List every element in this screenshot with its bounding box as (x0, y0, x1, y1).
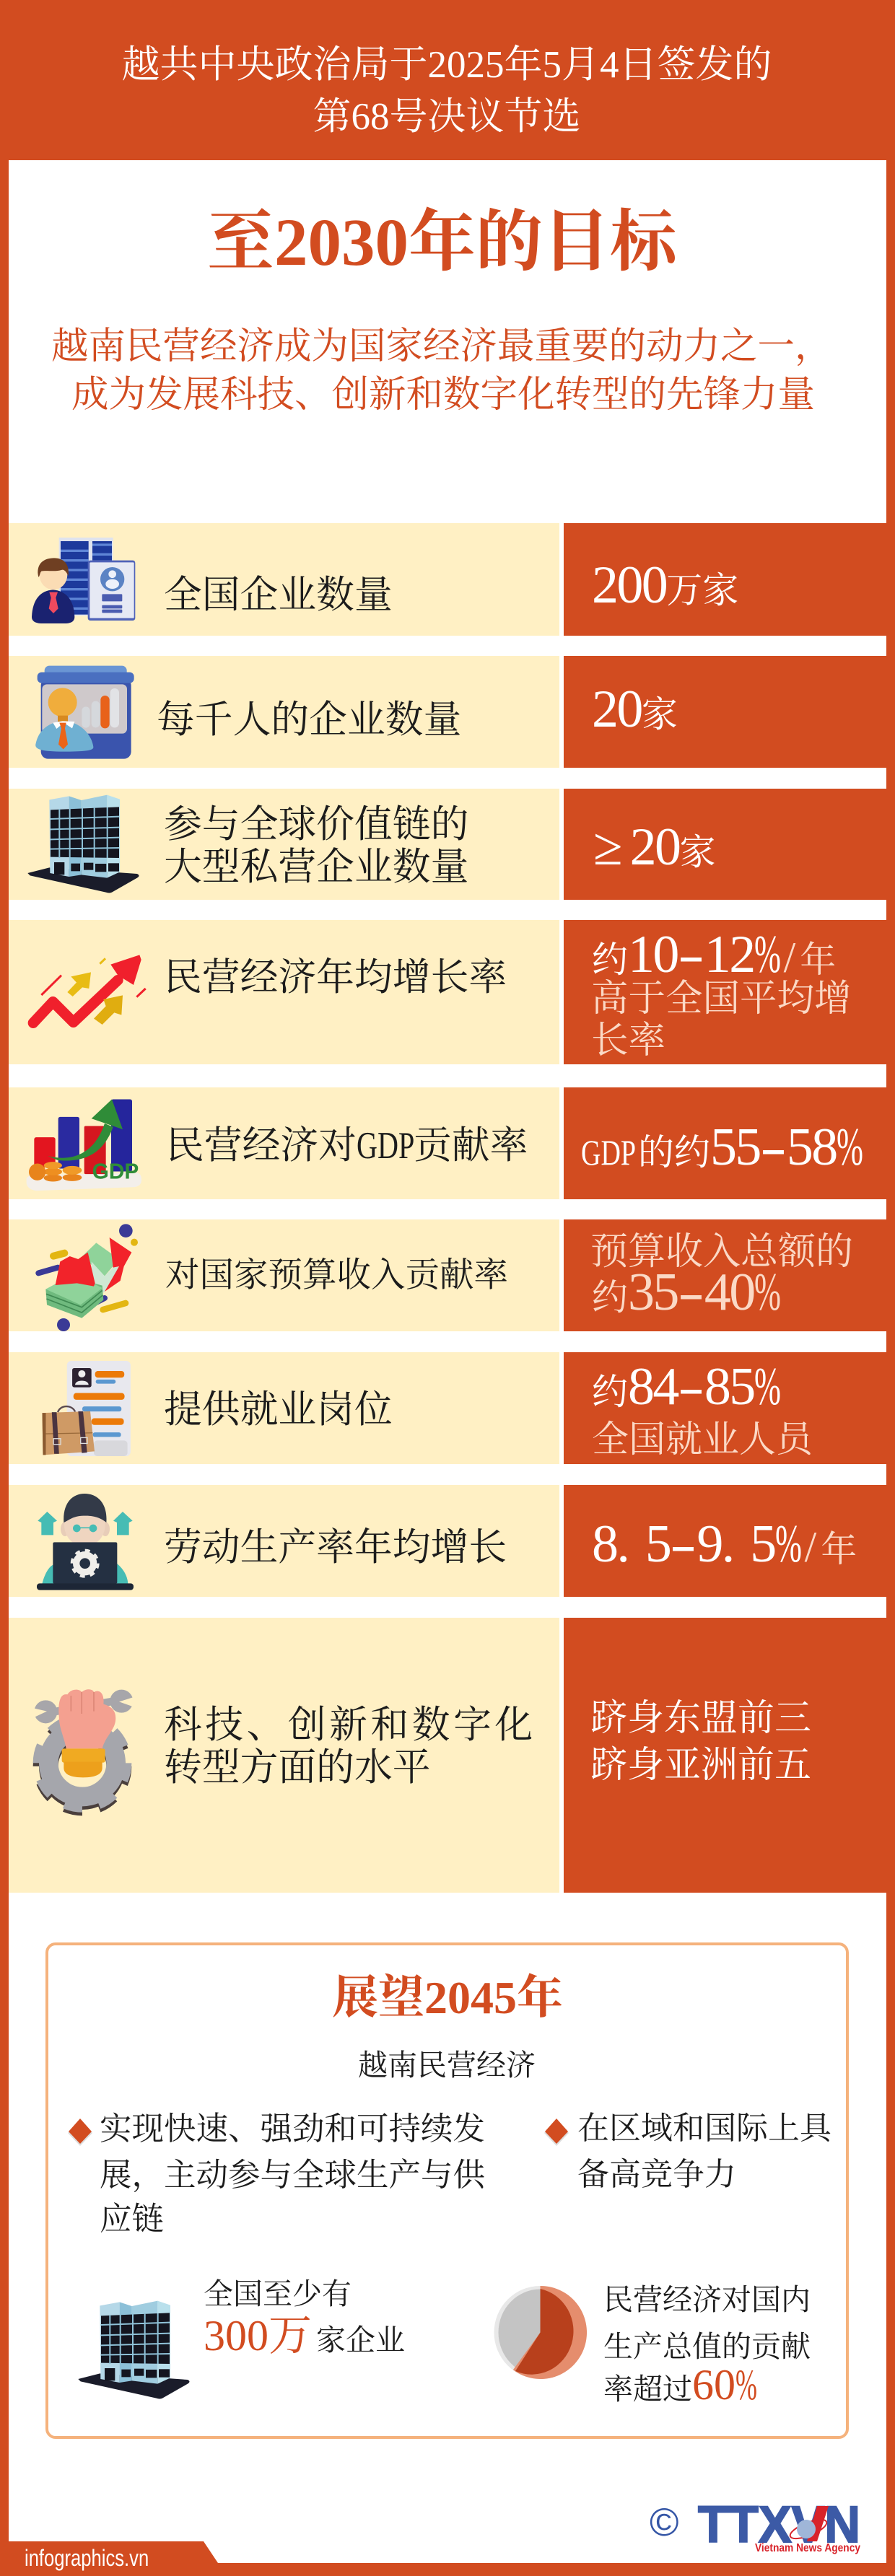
header title line 1: 越共中央政治局于2025年5月4日签发的 (121, 44, 772, 86)
row: large private enterprises in global value chains: 参与全球价值链的 (164, 804, 468, 846)
subtitle (51, 326, 832, 416)
panel: vision 2045 (45, 1942, 849, 2439)
stat: contribution over 60 percent: % (735, 2361, 757, 2409)
bullet 2: 在区域和国际上具 (577, 2111, 831, 2146)
source url: infographics.vn (25, 2545, 149, 2571)
panel heading: 展望2045年 (332, 1972, 563, 2023)
value panel (564, 1087, 886, 1199)
label (164, 804, 468, 888)
label: 民营经济年均增长率 (164, 957, 507, 999)
main heading: 至2030年的目标 (207, 206, 677, 280)
stat: contribution over 60 percent: 率超过60 (603, 2361, 735, 2409)
header title line 2: 第68号决议节选 (313, 96, 580, 138)
footer tab (9, 2541, 886, 2576)
logo: TTXVN: © (650, 2500, 679, 2544)
stat: contribution over 60 percent: 民营经济对国内 (603, 2283, 811, 2316)
icon: banknotes with red arrows (35, 1224, 138, 1331)
bullet 2 (544, 2111, 831, 2192)
label (164, 1704, 536, 1789)
row: science, innovation and digital transformation (9, 1618, 886, 1893)
value panel (564, 1485, 886, 1597)
icon: presenter with bar chart (35, 665, 134, 759)
label: 民营经济对 贡献率 (166, 1125, 528, 1167)
label: 提供就业岗位 (164, 1389, 393, 1431)
icon: office building (78, 2300, 189, 2398)
bullet text (100, 2111, 485, 2237)
icon: office building (27, 795, 139, 893)
bullet 1: 实现快速、强劲和可持续发 (100, 2111, 485, 2147)
stat: contribution over 60 percent (603, 2283, 811, 2409)
value panel (564, 1352, 886, 1464)
value: - (670, 1515, 694, 1574)
icon: worker at laptop with up arrows (37, 1494, 134, 1590)
header banner (0, 0, 895, 160)
row: labour productivity (9, 1485, 886, 1597)
left border (0, 0, 9, 2576)
row: jobs (9, 1352, 886, 1464)
icon: diamond (544, 2119, 569, 2146)
icon: businessman with building and ID card (32, 538, 136, 623)
value: % (775, 1515, 800, 1574)
row: science, innovation and digital transformation: 转型方面的水平 (164, 1747, 431, 1789)
stat: contribution over 60 percent: 生产总值的贡献 (603, 2330, 811, 2363)
row: enterprises per thousand people (9, 656, 886, 768)
value: GDP (581, 1132, 636, 1173)
value main: - (678, 1357, 702, 1416)
logo: TTXVN: TTXVN (698, 2497, 860, 2554)
value: ≥20家 (593, 818, 715, 877)
right border (886, 0, 895, 2576)
row: science, innovation and digital transformation: 科技、创新和数字化 (164, 1704, 536, 1746)
icon: diamond (68, 2119, 92, 2146)
bullet 1: 展，主动参与全球生产与供 (100, 2157, 485, 2193)
value panel (564, 920, 886, 1064)
bullet 1: 应链 (100, 2201, 164, 2237)
row: GDP contribution (9, 1087, 886, 1199)
label: 对国家预算收入贡献率 (165, 1257, 508, 1294)
stat: 3 million enterprises: 300万家企业 (204, 2312, 405, 2360)
value panel: 约35 40 (592, 1263, 754, 1322)
value: 200万家 (592, 556, 738, 615)
label: 全国企业数量 (164, 574, 393, 616)
subtitle: 越南民营经济成为国家经济最重要的动力之一， (51, 326, 832, 367)
row: number of enterprises (9, 523, 886, 636)
value: 20家 (592, 680, 678, 739)
bullet 1 (68, 2111, 485, 2237)
panel subtitle: 越南民营经济 (358, 2049, 536, 2082)
value: 跻身东盟前三 (590, 1699, 811, 1739)
value panel: % (754, 1263, 780, 1322)
icon: CV and briefcase (42, 1361, 131, 1456)
row: large private enterprises in global value chains (9, 789, 886, 900)
value note: 全国就业人员 (592, 1420, 813, 1460)
logo: TTXVN (648, 2504, 863, 2556)
label: 每千人的企业数量 (157, 699, 461, 741)
value main: - (678, 925, 702, 984)
chart: pie 60 percent (494, 2286, 587, 2379)
value: 8.5 9.5 /年 (592, 1515, 857, 1574)
value panel: 长率 (591, 1020, 665, 1061)
value panel: - (678, 1263, 702, 1322)
value panel (564, 789, 886, 900)
icon: GDP bar chart with arrow: GDP (92, 1159, 139, 1183)
value: 的约55 58 (638, 1118, 837, 1177)
value panel (564, 1219, 886, 1331)
icon: rising red arrow (27, 955, 147, 1028)
value main: 约10 12 /年 (592, 925, 836, 984)
row: annual growth rate (9, 920, 886, 1064)
bullet text (577, 2111, 831, 2192)
bullet 2: 备高竞争力 (577, 2157, 736, 2192)
value main: % (754, 925, 780, 984)
value panel (564, 1618, 886, 1893)
label: 劳动生产率年均增长 (164, 1527, 507, 1569)
icon: GDP bar chart with arrow (26, 1100, 141, 1191)
icon: hand holding wrench with gear (33, 1689, 133, 1815)
label: GDP (357, 1125, 414, 1167)
value: - (760, 1118, 784, 1177)
value note: 高于全国平均增 (591, 978, 852, 1020)
value panel (564, 656, 886, 768)
row: state budget contribution (9, 1219, 886, 1331)
logo: TTXVN: Vietnam News Agency (755, 2542, 860, 2554)
stat: 3 million enterprises (204, 2277, 405, 2360)
row: large private enterprises in global value chains: 大型私营企业数量 (164, 846, 468, 888)
value panel: 跻身亚洲前五 (590, 1745, 811, 1786)
value main: 约84 85 (592, 1357, 754, 1416)
value: 预算收入总额的 (590, 1232, 853, 1273)
value panel (564, 523, 886, 636)
value main: % (754, 1357, 780, 1416)
stat: 3 million enterprises: 全国至少有 (204, 2277, 352, 2310)
subtitle: 成为发展科技、创新和数字化转型的先锋力量 (71, 374, 815, 416)
value: % (837, 1118, 862, 1177)
